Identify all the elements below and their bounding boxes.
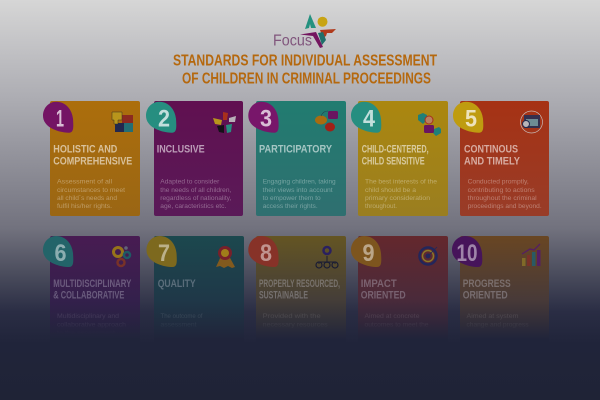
heading: PARTICIPATORY	[259, 144, 333, 156]
badge: 10: 10	[456, 240, 478, 267]
icon: calendar cycle	[520, 111, 542, 133]
icon: speech bubbles	[315, 111, 338, 132]
icon: growth chart	[522, 244, 540, 266]
heading: AND TIMELY	[464, 156, 521, 168]
text block	[57, 313, 126, 337]
badge: 2: 2	[158, 106, 170, 133]
heading: ORIENTED	[463, 290, 508, 302]
heading: & COLLABORATIVE	[53, 290, 124, 302]
text block: throughout.	[365, 203, 397, 210]
text block: proceedings and beyond.	[468, 203, 542, 210]
text block: Multidisciplinary and	[57, 313, 119, 320]
text block: access their rights.	[263, 203, 318, 210]
panel: 8 properly resourced, sustainable	[248, 236, 346, 351]
panel: 3 participatory	[248, 101, 346, 216]
icon: resource network	[316, 247, 338, 268]
title: OF CHILDREN IN CRIMINAL PROCEEDINGS	[182, 70, 431, 88]
icon: gears	[114, 246, 130, 266]
text block: child should be a	[365, 187, 416, 194]
text block: primary consideration	[365, 195, 430, 202]
text block: Aimed at system	[466, 313, 519, 320]
heading: PROGRESS	[463, 278, 511, 290]
text block: The outcome of	[160, 313, 203, 320]
text block	[468, 178, 542, 210]
heading: CHILD-CENTERED,	[362, 144, 429, 156]
text block: circumstances to meet	[57, 187, 125, 194]
text block	[57, 178, 125, 210]
panel: 6 multidisciplinary and collaborative	[43, 236, 140, 351]
text block: change and progress	[466, 322, 529, 328]
text block: Adapted to consider	[160, 178, 220, 186]
text block	[364, 313, 429, 328]
badge: 5: 5	[465, 106, 477, 133]
text block: Engaging children, taking	[263, 178, 336, 186]
heading: PROPERLY RESOURCED,	[259, 278, 340, 290]
text block: Provided with the	[263, 313, 321, 320]
text block: regardless of nationality,	[160, 195, 231, 202]
badge: 3: 3	[260, 106, 272, 133]
panel: 5 continous and timely	[453, 101, 549, 216]
text block: outcomes to meet the	[364, 322, 429, 328]
text block: to empower them to	[263, 195, 321, 202]
text block: necessary resources	[263, 322, 328, 328]
heading: IMPACT	[361, 278, 397, 290]
text block: age, caracteristics etc.	[160, 203, 226, 210]
heading	[362, 144, 429, 168]
panel: 1 holistic and comprehensive	[43, 101, 140, 216]
text block	[160, 178, 231, 210]
panel: 4 child-centered, child sensitive	[351, 101, 448, 216]
icon: hands	[213, 112, 236, 133]
icon: puzzle	[112, 112, 133, 132]
heading	[53, 144, 132, 168]
text block: their views into account	[263, 187, 333, 194]
heading: ORIENTED	[361, 290, 406, 302]
heading: QUALITY	[158, 278, 196, 290]
panel: 7 quality	[146, 236, 244, 351]
heading: CONTINOUS	[464, 144, 518, 156]
panel: 10 progress oriented	[452, 236, 549, 351]
text block: fulfil his/her rights.	[57, 203, 112, 210]
badge: 1: 1	[56, 106, 64, 133]
title	[173, 52, 437, 88]
heading: HOLISTIC AND	[53, 144, 117, 156]
heading: SUSTAINABLE	[259, 290, 308, 302]
badge: 8: 8	[260, 240, 272, 267]
text block	[365, 178, 437, 210]
text block	[466, 313, 529, 328]
heading	[53, 278, 132, 302]
logo: Focus	[273, 14, 336, 50]
text block: The best interests of the	[365, 178, 437, 186]
panel: 2 inclusive	[146, 101, 243, 216]
text block: collaborative approach	[57, 322, 126, 328]
text block: assessment	[160, 322, 197, 328]
text block: Aimed at concrete	[364, 313, 420, 320]
badge: 9: 9	[362, 240, 374, 267]
badge: 4: 4	[363, 106, 376, 133]
badge: 7: 7	[158, 240, 170, 267]
icon: child with shields	[418, 113, 441, 136]
text block: contributing to actions	[468, 187, 535, 194]
title: STANDARDS FOR INDIVIDUAL ASSESSMENT	[173, 52, 437, 70]
icon: target	[420, 247, 437, 264]
panel: 9 impact oriented	[351, 236, 448, 351]
heading	[361, 278, 406, 302]
logo: Focus: Focus	[273, 33, 312, 50]
badge: 6: 6	[54, 240, 66, 267]
text block: all child´s needs and	[57, 195, 117, 202]
text block	[160, 313, 203, 328]
heading	[259, 278, 340, 302]
text block	[263, 313, 328, 328]
heading: MULTIDISCIPLINARY	[53, 278, 132, 290]
text block: the needs of all children,	[160, 187, 231, 194]
text block: Conducted promptly,	[468, 178, 529, 186]
heading: INCLUSIVE	[157, 144, 205, 156]
text block: to the assessment.	[57, 330, 117, 337]
text block: throughout the criminal	[468, 195, 537, 202]
heading: CHILD SENSITIVE	[362, 156, 425, 168]
heading	[464, 144, 521, 168]
heading: COMPREHENSIVE	[53, 156, 132, 168]
heading	[463, 278, 511, 302]
text block	[263, 178, 336, 210]
icon: rosette	[216, 246, 235, 268]
text block: Assessment of all	[57, 178, 113, 186]
